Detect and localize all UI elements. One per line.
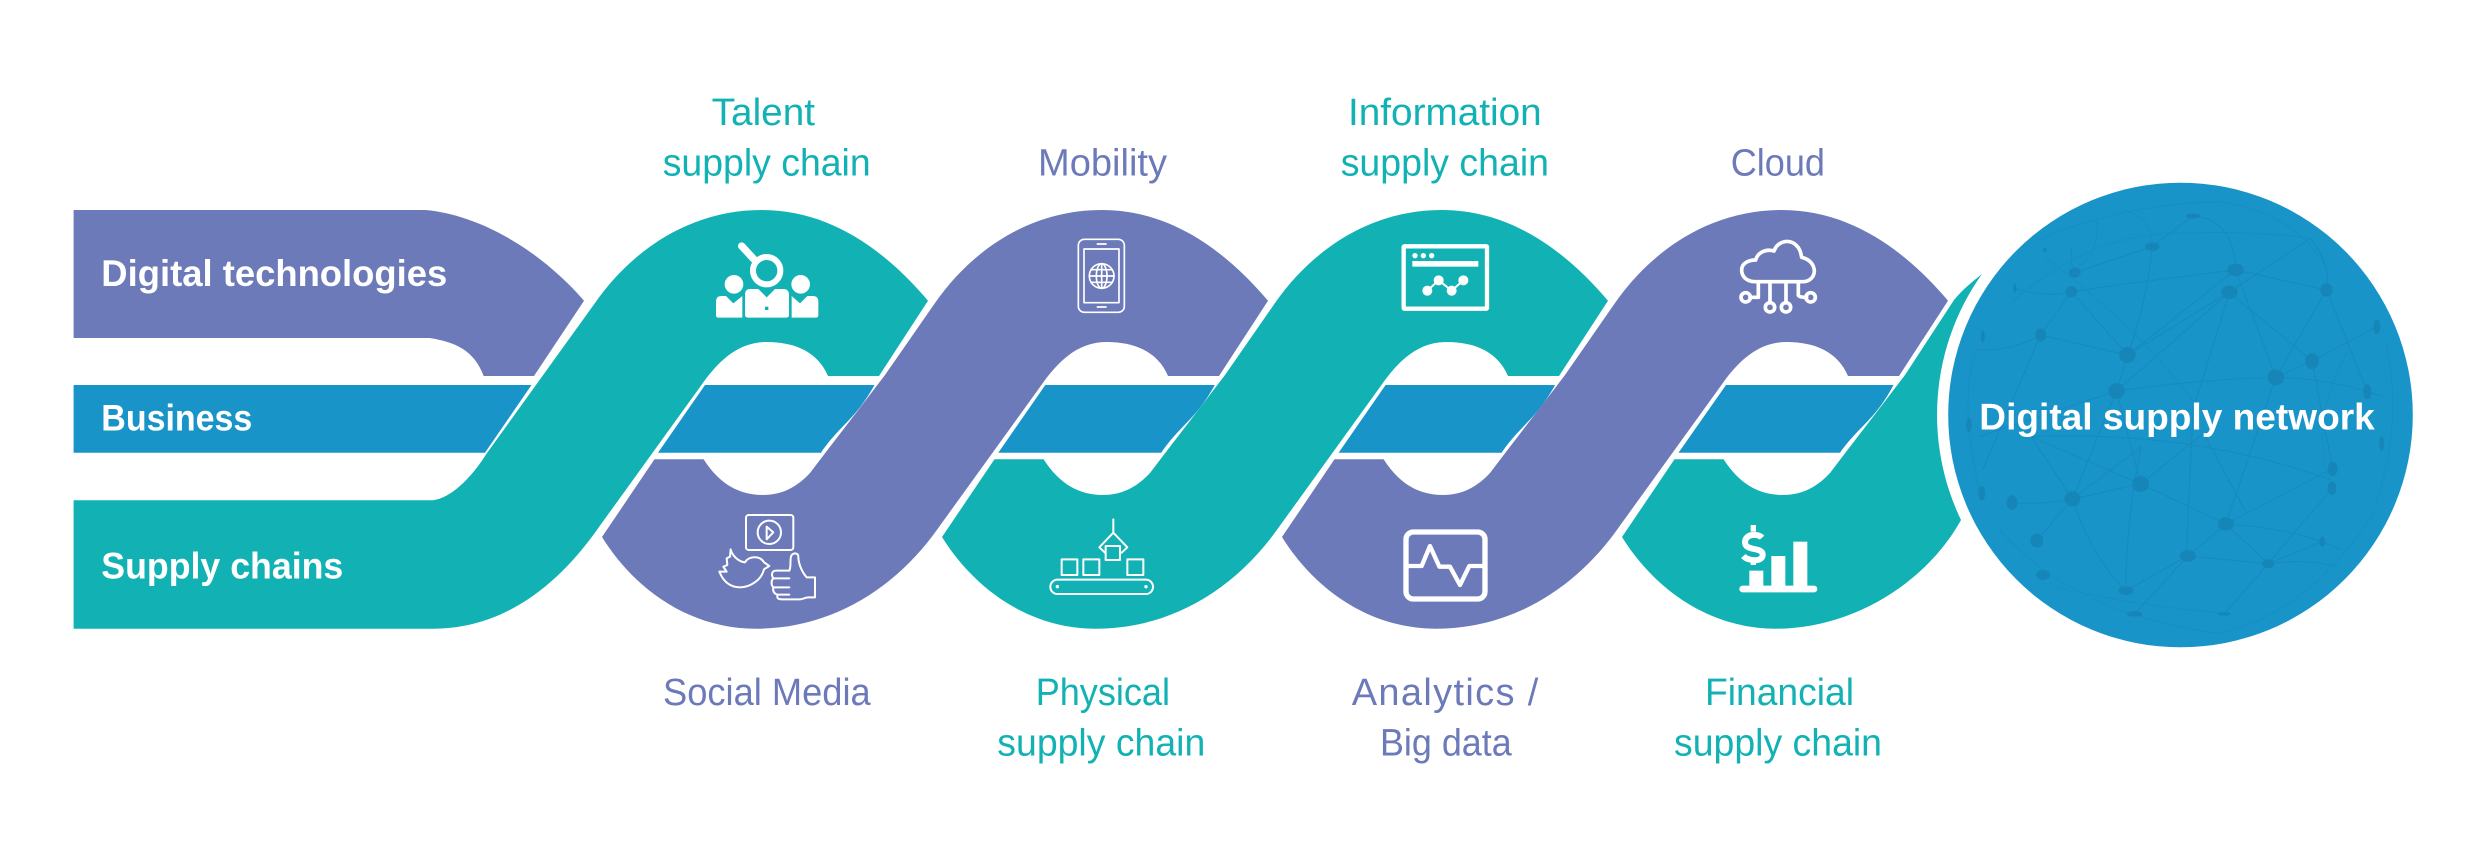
ribbon: financial supply chain into the globe [1622, 274, 1982, 629]
ribbon: business start [74, 385, 531, 453]
label: Talent supply chain [663, 92, 871, 185]
ribbon: supply chains start and talent arch [74, 210, 928, 629]
label: Analytics / Big data: Big data [1380, 723, 1513, 765]
label: Talent supply chain: Talent [712, 92, 815, 134]
heading: Supply chains: Supply chains [101, 545, 343, 586]
ribbon: analytics to cloud [1282, 210, 1948, 629]
label: Physical supply chain: Physical [1036, 672, 1170, 714]
ribbon: physical to information supply chain [942, 210, 1608, 629]
icon: social media video, bird and thumb [719, 515, 815, 599]
label: Information supply chain: Information [1348, 92, 1542, 134]
heading: Digital supply network: Digital supply network [1979, 396, 2375, 437]
label: Financial supply chain [1674, 672, 1882, 765]
label: Analytics / Big data: Analytics / [1352, 672, 1539, 714]
network lines and nodes [1966, 202, 2393, 633]
icon: analytics monitor [1406, 532, 1485, 599]
label: Mobility: Mobility [1038, 143, 1167, 185]
heading: Digital technologies: Digital technologies [101, 253, 447, 294]
label: Physical supply chain: supply chain [997, 723, 1205, 765]
icon: dollar and bar chart [1739, 525, 1817, 592]
icon: conveyor belt [1050, 519, 1153, 594]
icon: cloud network [1741, 242, 1815, 312]
ribbon: digital technologies start [74, 210, 584, 376]
globe: digital supply network [1948, 183, 2413, 647]
label: Social Media: Social Media [663, 672, 872, 714]
label: Information supply chain [1341, 92, 1549, 185]
label: Analytics / Big data [1352, 672, 1539, 765]
label: Information supply chain: supply chain [1341, 143, 1549, 185]
label: Physical supply chain [997, 672, 1205, 765]
heading: Business: Business [101, 398, 252, 439]
icon: talent search [716, 246, 818, 318]
label: Financial supply chain: Financial [1705, 672, 1854, 714]
label: Financial supply chain: supply chain [1674, 723, 1882, 765]
ribbon: social media to mobility [602, 210, 1268, 629]
icon: browser window with chart [1404, 246, 1487, 309]
icon: smartphone with globe [1078, 239, 1124, 312]
business band segments [658, 385, 1894, 453]
label: Talent supply chain: supply chain [663, 143, 871, 185]
label: Cloud: Cloud [1731, 143, 1825, 185]
